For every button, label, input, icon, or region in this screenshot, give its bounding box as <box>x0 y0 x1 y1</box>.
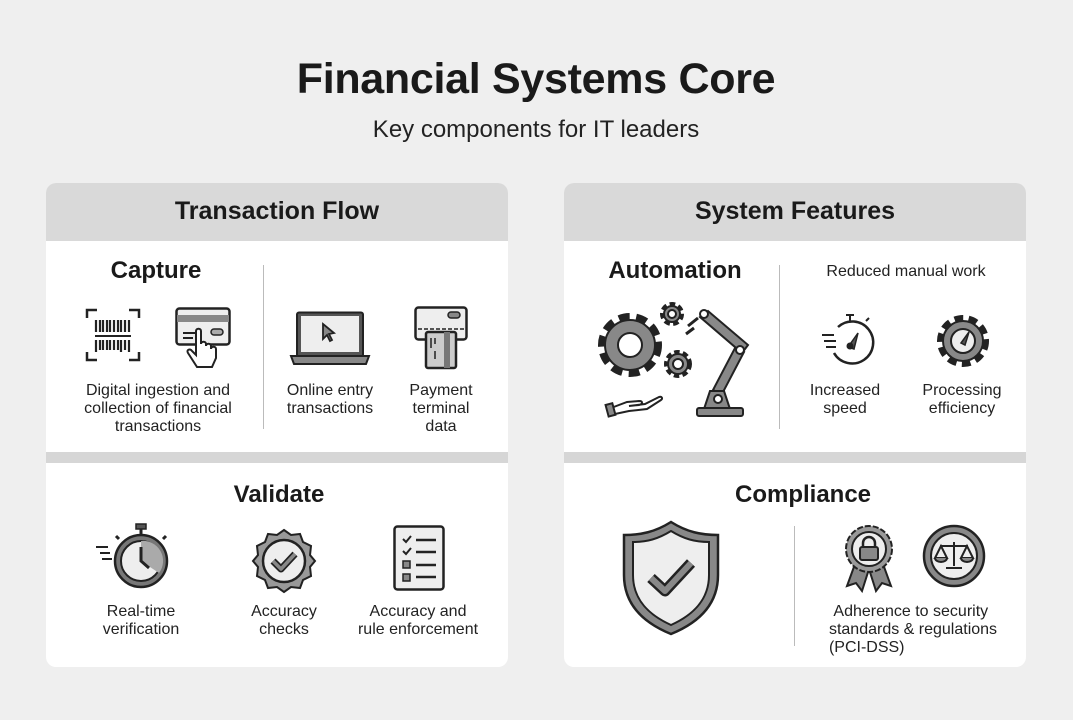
text: rule enforcement: rule enforcement <box>358 621 478 638</box>
subtitle: Key components for IT leaders <box>373 116 699 143</box>
text: real-time <box>102 603 179 638</box>
text: capture description: Digital ingestion and <box>86 382 230 399</box>
icon: gears and robot arm <box>598 302 750 418</box>
icon: stopwatch <box>96 523 168 588</box>
text: adherence <box>829 603 997 656</box>
icon: card with hand <box>175 307 231 368</box>
text: accuracy checks: checks <box>259 621 309 638</box>
text: payment terminal: terminal <box>413 400 469 417</box>
text: capture description: collection of financial <box>84 400 232 417</box>
heading: compliance: Compliance <box>735 481 871 508</box>
text: payment terminal: data <box>425 418 457 435</box>
text: rule enforcement <box>358 603 478 638</box>
icon: payment terminal <box>414 306 468 370</box>
text: real-time: verification <box>103 621 179 638</box>
icon: scale of justice <box>922 524 986 588</box>
header: system features <box>564 183 1026 241</box>
text: payment terminal: Payment <box>409 382 473 399</box>
icon: checklist <box>393 525 445 591</box>
heading: automation: Automation <box>608 257 742 284</box>
text: online entry <box>287 382 374 417</box>
text: accuracy checks: Accuracy <box>251 603 317 620</box>
header: transaction flow: Transaction Flow <box>175 197 379 225</box>
icon: efficiency gear <box>937 315 989 367</box>
text: adherence: Adherence to security <box>833 603 988 620</box>
icon: speed stopwatch <box>822 314 874 365</box>
icon: shield check <box>622 520 720 636</box>
panel: system features <box>564 183 1026 667</box>
text: processing efficiency: Processing <box>922 382 1002 399</box>
text: accuracy checks <box>251 603 317 638</box>
text: processing efficiency <box>922 382 1002 417</box>
title: Financial Systems Core <box>297 55 775 103</box>
header: system features: System Features <box>695 197 895 225</box>
text: payment terminal <box>409 382 473 435</box>
text: adherence: (PCI-DSS) <box>829 639 905 656</box>
text: rule enforcement: Accuracy and <box>370 603 466 620</box>
panel: transaction flow <box>46 183 508 667</box>
text: processing efficiency: efficiency <box>929 400 995 417</box>
text: adherence: standards & regulations <box>829 621 997 638</box>
text: reduced manual work: Reduced manual work <box>826 263 986 280</box>
heading: validate: Validate <box>234 481 324 508</box>
text: real-time: Real-time <box>107 603 175 620</box>
header: transaction flow <box>46 183 508 241</box>
heading: capture: Capture <box>111 257 201 284</box>
text: capture description <box>84 382 232 435</box>
icon: laptop with cursor <box>290 312 370 365</box>
text: capture description: transactions <box>115 418 201 435</box>
icon: accuracy badge <box>252 528 316 594</box>
icon: lock award <box>845 525 893 593</box>
text: online entry: transactions <box>287 400 373 417</box>
text: increased speed: Increased <box>810 382 880 399</box>
text: online entry: Online entry <box>287 382 373 399</box>
text: increased speed <box>810 382 880 417</box>
text: increased speed: speed <box>823 400 867 417</box>
icon: barcode scanner <box>86 308 140 362</box>
